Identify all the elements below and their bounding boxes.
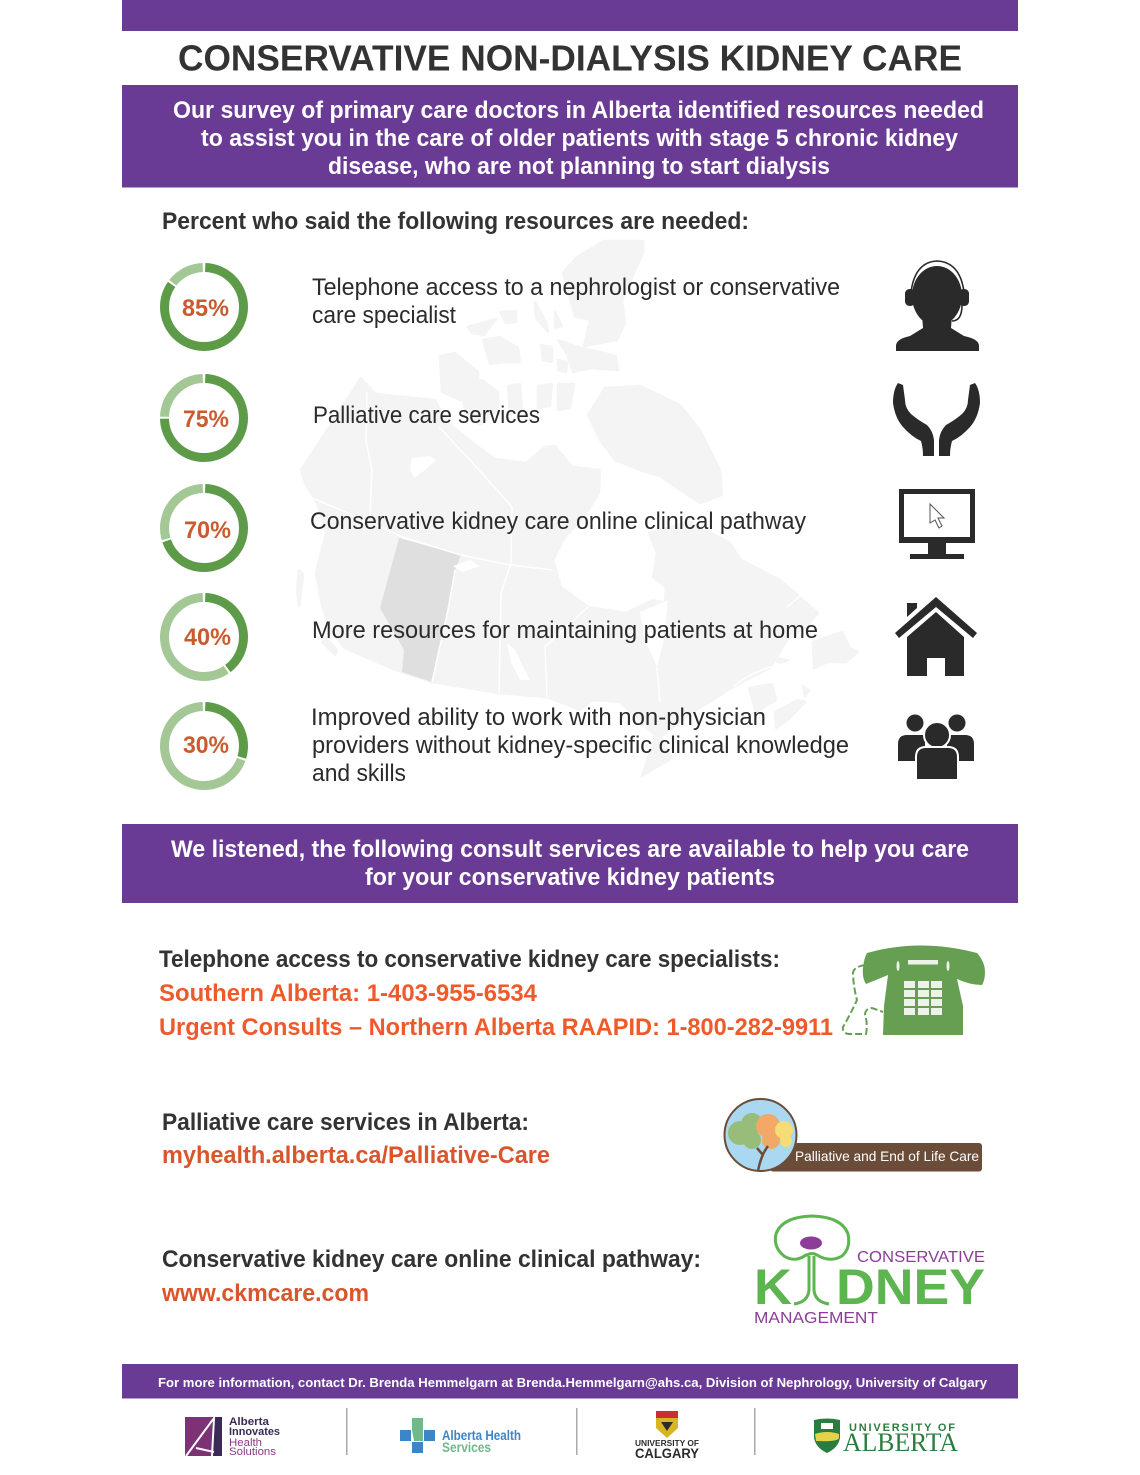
donut chart: 70%: 70%: [184, 517, 231, 544]
row text: telephone access: [312, 274, 840, 329]
row text: non-physician providers: Improved ability to work with non-physician: [311, 704, 766, 731]
row text: palliative care services: Palliative care services: [313, 402, 540, 429]
donut chart: 70%: [164, 488, 244, 568]
banner: we listened: for your conservative kidney patients: [365, 864, 775, 891]
logo: University of Alberta: UNIVERSITY OF: [849, 1422, 955, 1434]
text block: online clinical pathway link: Conservative kidney care online clinical pathway:: [162, 1246, 701, 1273]
text block: online clinical pathway link: www.ckmcare.com: [161, 1280, 369, 1307]
banner: survey introduction: [122, 85, 1018, 188]
donut chart: 85%: [164, 268, 244, 346]
logo: Alberta Innovates Health Solutions: [185, 1416, 280, 1458]
donut chart: 75%: 75%: [183, 406, 229, 433]
icon: open hands: [893, 383, 980, 456]
heading: percent who said resources are needed: Percent who said the following resources are needed:: [162, 208, 749, 235]
donut chart: 40%: [164, 598, 244, 676]
banner: survey introduction: disease, who are not planning to start dialysis: [328, 153, 830, 180]
top purple bar: [122, 0, 1018, 31]
text block: telephone consult numbers: Telephone access to conservative kidney care specialists:: [159, 946, 780, 973]
logo: Alberta Health Services: Services: [442, 1439, 491, 1455]
text block: palliative care services in Alberta: myhealth.alberta.ca/Palliative-Care: [162, 1142, 550, 1169]
banner: survey introduction: to assist you in the care of older patients with stage 5 chronic kidney: [201, 125, 959, 152]
text block: telephone consult numbers: Southern Alberta: 1-403-955-6534: [159, 980, 538, 1007]
text block: online clinical pathway link: [161, 1246, 701, 1307]
logo: Alberta Innovates Health Solutions: Solutions: [229, 1446, 277, 1458]
logo: Palliative and End of Life Care: [724, 1099, 982, 1172]
row text: maintaining patients at home: More resources for maintaining patients at home: [312, 617, 818, 644]
logo: University of Calgary: UNIVERSITY OF: [635, 1439, 699, 1448]
Alberta: [380, 538, 461, 682]
footer contact bar: [122, 1364, 1018, 1398]
banner: we listened: [122, 824, 1018, 903]
logo: Alberta Health Services: Alberta Health: [442, 1427, 521, 1443]
row text: non-physician providers: providers without kidney-specific clinical knowledge: [312, 732, 849, 759]
row text: telephone access: Telephone access to a nephrologist or conservative: [312, 274, 840, 301]
text block: telephone consult numbers: Urgent Consults – Northern Alberta RAAPID: 1-800-282-9911: [159, 1014, 833, 1041]
row text: online clinical pathway: Conservative kidney care online clinical pathway: [310, 508, 806, 535]
logo: University of Alberta: ALBERTA: [843, 1428, 958, 1457]
row text: non-physician providers: and skills: [312, 760, 406, 787]
text block: telephone consult numbers: [159, 946, 833, 1041]
footer contact bar: For more information, contact Dr. Brenda Hemmelgarn at Brenda.Hemmelgarn@ahs.ca, Division of Nephrology, University of Calgary: [158, 1375, 988, 1390]
donut chart: 30%: 30%: [183, 732, 229, 759]
icon: headset agent: [896, 261, 979, 351]
logo: Conservative Kidney Management: CONSERVATIVE: [857, 1249, 985, 1266]
icon: house: [895, 597, 977, 676]
text block: palliative care services in Alberta: [162, 1109, 550, 1169]
banner: we listened: We listened, the following consult services are available to help you care: [171, 836, 969, 863]
icon: group of people: [898, 714, 974, 780]
logo: University of Calgary: CALGARY: [635, 1446, 699, 1461]
logo: University of Alberta: [814, 1418, 958, 1457]
donut chart: 30%: [164, 706, 244, 786]
donut chart: 85%: 85%: [182, 295, 229, 322]
icon: computer monitor with cursor: [899, 489, 975, 559]
donut chart: 75%: [164, 378, 244, 458]
logo: Conservative Kidney Management: MANAGEMENT: [754, 1310, 878, 1327]
logo: Conservative Kidney Management: [754, 1216, 985, 1327]
donut chart: 40%: 40%: [184, 624, 231, 651]
background map of Canada with Alberta highlighted: [297, 241, 858, 776]
logo: Alberta Innovates Health Solutions: Health: [229, 1437, 262, 1449]
logo: Alberta Health Services: [400, 1418, 521, 1455]
row text: non-physician providers: [311, 704, 849, 787]
logo: Palliative and End of Life Care: Palliative and End of Life Care: [795, 1148, 979, 1164]
logo: Alberta Innovates Health Solutions: Alberta: [229, 1416, 270, 1428]
logo: Conservative Kidney Management: DNEY: [836, 1259, 985, 1315]
row text: telephone access: care specialist: [312, 302, 456, 329]
logo: Alberta Innovates Health Solutions: Innovates: [229, 1426, 280, 1438]
title: CONSERVATIVE NON-DIALYSIS KIDNEY CARE: [178, 38, 962, 78]
logo: University of Calgary: [635, 1411, 699, 1461]
banner: survey introduction: Our survey of primary care doctors in Alberta identified resources needed: [173, 97, 984, 124]
icon: green telephone: [843, 946, 985, 1035]
text block: palliative care services in Alberta: Palliative care services in Alberta:: [162, 1109, 529, 1136]
logo: Conservative Kidney Management: K: [754, 1259, 792, 1315]
